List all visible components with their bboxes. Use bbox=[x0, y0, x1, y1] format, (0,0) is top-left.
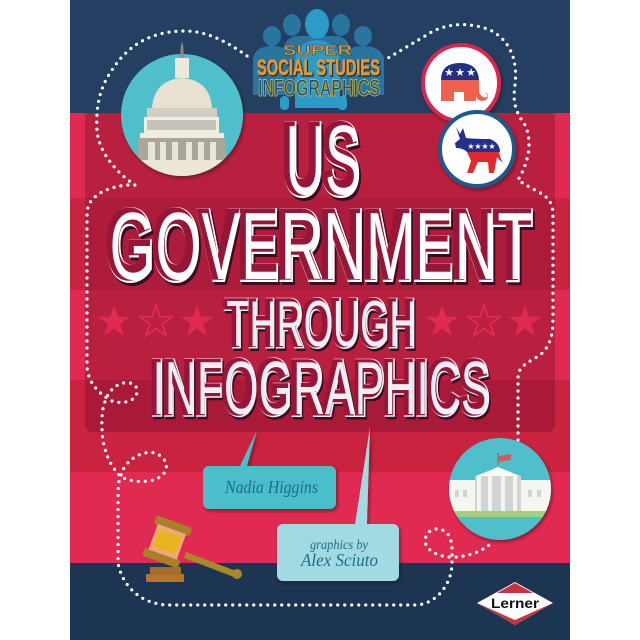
elephant stars: ★ bbox=[466, 66, 476, 79]
logo word: social studies: SOCIAL STUDIES bbox=[257, 55, 380, 80]
callout: illustrator bbox=[277, 427, 399, 581]
donkey body bbox=[455, 127, 500, 152]
title bbox=[106, 103, 534, 432]
donkey stars: ★ bbox=[474, 142, 482, 151]
title word: US: US bbox=[282, 103, 358, 213]
logo centre figure bbox=[280, 9, 347, 110]
elephant stars: ★ bbox=[444, 66, 454, 79]
title word: US: US bbox=[286, 105, 362, 215]
logo: super social studies infographics bbox=[253, 9, 384, 110]
callout: author bbox=[203, 430, 336, 509]
logo crowd silhouettes bbox=[253, 14, 384, 95]
donkey stars bbox=[467, 142, 496, 151]
title word: through: THROUGH bbox=[226, 287, 416, 360]
title word: US: US bbox=[283, 104, 359, 214]
title word: infographics bbox=[150, 345, 490, 432]
title word: through: THROUGH bbox=[224, 286, 414, 359]
elephant body bbox=[441, 63, 479, 80]
capitol statue bbox=[180, 41, 184, 58]
cover background bbox=[70, 0, 570, 640]
icon: gavel bbox=[142, 515, 242, 582]
title word: through: THROUGH bbox=[225, 286, 415, 360]
elephant stars: ★ bbox=[455, 66, 465, 79]
author name: Nadia Higgins bbox=[224, 477, 318, 497]
decorative stars right bbox=[426, 305, 541, 336]
icon: democratic donkey badge bbox=[440, 112, 514, 186]
logo word: social studies bbox=[257, 55, 381, 81]
title word: US bbox=[282, 103, 362, 217]
decorative stars left bbox=[98, 305, 213, 336]
donkey stars: ★ bbox=[488, 142, 496, 151]
graphics by label: graphics by bbox=[310, 538, 369, 553]
title word: through bbox=[224, 286, 416, 362]
donkey stars: ★ bbox=[467, 142, 475, 151]
panel: title backdrop bbox=[85, 113, 555, 432]
dotted route line right bbox=[388, 25, 553, 440]
logo word: infographics: INFOGRAPHICS bbox=[258, 75, 380, 102]
elephant stars bbox=[444, 66, 476, 79]
donkey stars: ★ bbox=[481, 142, 489, 151]
icon: capitol dome bbox=[120, 41, 244, 180]
logo word: social studies: SOCIAL STUDIES bbox=[258, 56, 381, 81]
icon: white house bbox=[445, 438, 555, 540]
lerner wordmark: Lerner bbox=[491, 595, 540, 611]
icon: republican elephant badge bbox=[423, 45, 499, 121]
logo word: super: SUPER bbox=[283, 42, 352, 59]
logo: lerner bbox=[477, 582, 553, 625]
title word: US: US bbox=[285, 107, 361, 217]
title word: through: THROUGH bbox=[226, 289, 416, 362]
illustrator name: Alex Sciuto bbox=[300, 550, 378, 570]
dotted route line bbox=[87, 31, 492, 605]
